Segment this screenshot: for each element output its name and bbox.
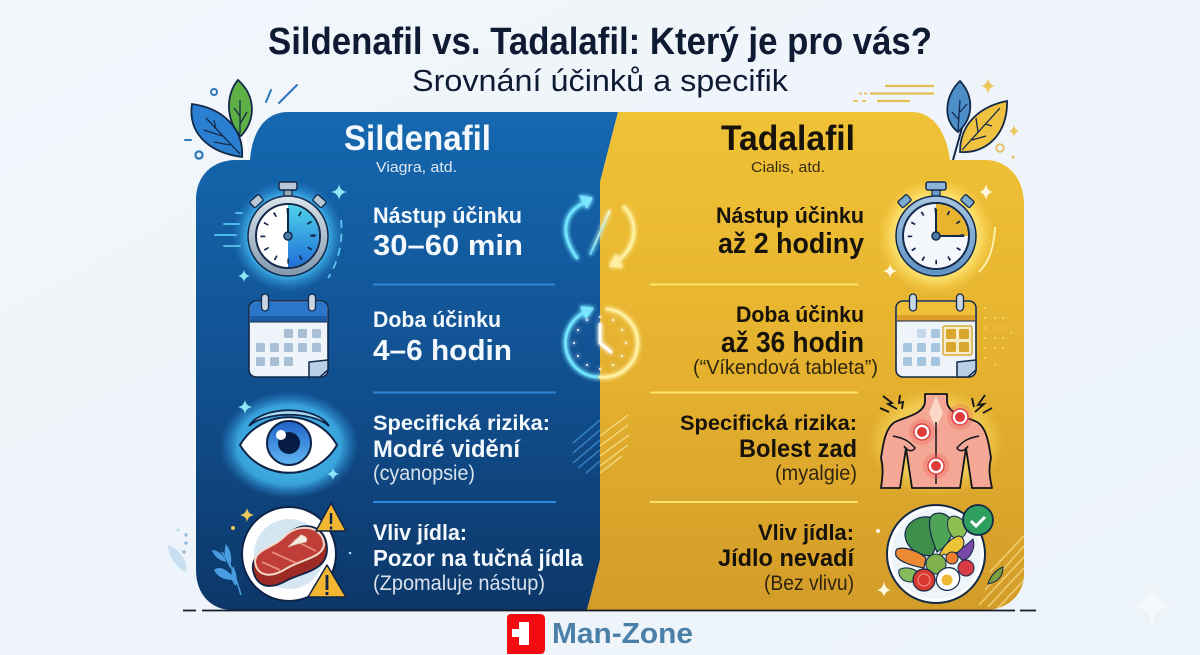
text: risk tadalafil: (myalgie) [775, 462, 857, 485]
title: Sildenafil vs. Tadalafil: Který je pro vás? [268, 21, 932, 63]
dots: calendar decoration [984, 307, 1012, 366]
text: risk tadalafil: Bolest zad [739, 435, 857, 463]
heading: sildenafil: Viagra, atd. [376, 159, 457, 176]
icon: centre exchange arrows [566, 196, 634, 267]
heading: sildenafil: Sildenafil [344, 119, 491, 158]
decoration: faint sparkle [1132, 586, 1172, 626]
text: onset sildenafil [373, 203, 523, 262]
text: risk tadalafil: Specifická rizika: [680, 412, 857, 435]
heading: tadalafil [721, 119, 855, 176]
text: onset tadalafil: až 2 hodiny [718, 228, 864, 260]
text: risk sildenafil: (cyanopsie) [373, 462, 475, 485]
text: duration tadalafil: (“Víkendová tableta”) [693, 357, 878, 379]
text: onset sildenafil: Nástup účinku [373, 203, 522, 228]
heading: tadalafil: Cialis, atd. [751, 159, 825, 176]
icon: calendar yellow [896, 294, 976, 377]
icon: steak with warnings [212, 503, 351, 601]
leaves: left [185, 80, 297, 160]
text: food tadalafil: Jídlo nevadí [718, 545, 855, 572]
icon: centre clock [565, 307, 638, 377]
text: duration tadalafil: Doba účinku [736, 302, 864, 327]
logo: man-zone [507, 614, 693, 654]
hatch: bottom right [979, 536, 1024, 609]
text: duration sildenafil: Doba účinku [373, 307, 501, 332]
panel: tadalafil background [587, 112, 1024, 610]
leaves: right [853, 78, 1019, 160]
logo: man-zone: Man-Zone [552, 618, 693, 650]
heading: tadalafil: Tadalafil [721, 119, 855, 158]
text: risk sildenafil: Modré vidění [373, 436, 521, 463]
text: risk sildenafil [373, 412, 550, 485]
text: duration sildenafil [373, 307, 512, 367]
panel: sildenafil background [196, 112, 618, 610]
text: duration tadalafil [693, 302, 878, 379]
icon: back pain [868, 388, 1004, 496]
text: food sildenafil: Pozor na tučná jídla [373, 545, 583, 571]
subtitle: Srovnání účinků a specifik [412, 63, 789, 98]
heading: sildenafil [344, 119, 491, 176]
text: food sildenafil [373, 520, 583, 595]
text: food sildenafil: (Zpomaluje nástup) [373, 572, 545, 595]
text: onset tadalafil [716, 203, 864, 260]
icon: eye [219, 391, 359, 499]
text: onset sildenafil: 30–60 min [373, 230, 523, 262]
hatch: centre [573, 415, 629, 473]
text: onset tadalafil: Nástup účinku [716, 203, 864, 228]
text: food tadalafil: Vliv jídla: [758, 520, 854, 545]
text: duration sildenafil: 4–6 hodin [373, 335, 512, 367]
icon: stopwatch yellow [878, 178, 995, 294]
text: risk sildenafil: Specifická rizika: [373, 412, 550, 435]
text: risk tadalafil [680, 412, 857, 485]
text: food tadalafil [718, 520, 855, 595]
icon: salad plate [876, 505, 1003, 603]
text: food sildenafil: Vliv jídla: [373, 520, 467, 545]
text: food tadalafil: (Bez vlivu) [764, 572, 854, 595]
infographic [168, 26, 1036, 654]
text: duration tadalafil: až 36 hodin [721, 327, 864, 359]
icon: calendar blue [249, 294, 328, 377]
decoration: faded leaf [168, 528, 188, 572]
icon: stopwatch blue [215, 180, 347, 292]
